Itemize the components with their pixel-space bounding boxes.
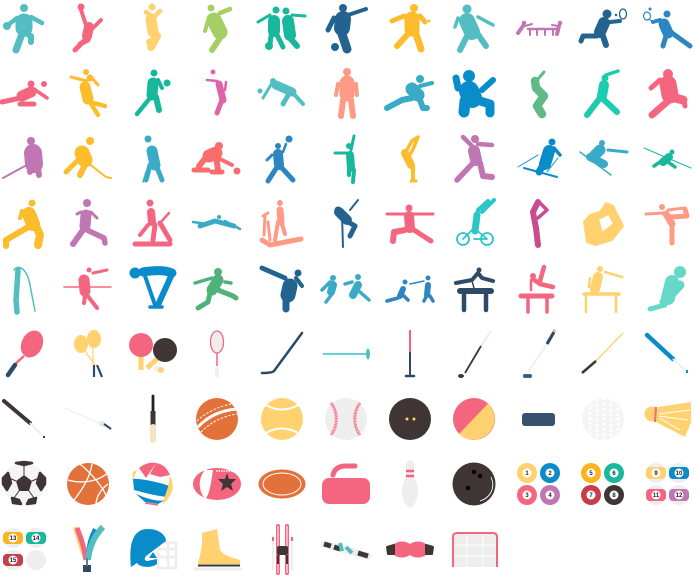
- icon: baseball catcher: [456, 76, 493, 113]
- icon: two martial artists: [322, 277, 369, 302]
- icon: basketball: [67, 463, 109, 505]
- icon: seated figure: [650, 272, 680, 309]
- icon: handball player: [267, 139, 293, 181]
- icon: football player running: [387, 79, 432, 108]
- icon: yoga warrior pose: [387, 208, 433, 241]
- icon: figure skater jump: [457, 137, 492, 180]
- icon: alpine skier: [518, 142, 560, 177]
- icon: red and navy mallet: [406, 330, 414, 376]
- icon: rugby ball: [258, 470, 306, 498]
- icon: billiard balls 1 to 4: 1: [525, 471, 529, 477]
- icon: baseball batter standing: [535, 72, 544, 114]
- icon: tennis ball: [261, 398, 303, 440]
- icon: billiard balls 1 to 4: 4: [548, 493, 552, 499]
- icon: baseball pitcher: [651, 74, 685, 115]
- icon: billiard balls 9 to 12: 12: [676, 493, 683, 499]
- icon: table tennis match: [518, 23, 560, 35]
- icon: tennis racket of serving player: [644, 12, 650, 20]
- icon: billiard balls 9 to 12: 10: [676, 471, 683, 477]
- icon: curling player: [194, 146, 237, 172]
- icon: american football: [193, 468, 241, 500]
- icon: table tennis player forehand: [392, 8, 429, 49]
- icon: billiard balls 5 to 8: [581, 463, 624, 505]
- icon: cricket ball: [196, 398, 238, 440]
- icon: downhill skier crouched: [644, 148, 691, 168]
- icon: billiard balls 13 to 15 and cue ball: [3, 528, 46, 570]
- icon: volleyball: [132, 463, 174, 505]
- icon: female runner: [73, 203, 105, 244]
- icon: billiard balls 1 to 4: 3: [525, 493, 529, 499]
- icon: billiard balls 9 to 12: [646, 463, 689, 505]
- icon: blue baseball bat: [647, 335, 687, 373]
- icon: volleyball dig: [260, 81, 303, 104]
- icon: billiard balls 9 to 12: 11: [653, 493, 660, 499]
- icon: billiard balls 13 to 15 and cue ball: 13: [10, 536, 17, 542]
- icon: billiard balls 5 to 8: 5: [589, 471, 593, 477]
- icon: golf ball: [582, 398, 624, 440]
- icon: skis and poles: [273, 526, 292, 573]
- icon: billiard balls 1 to 4: 2: [548, 471, 552, 477]
- icon: cricket bat: [152, 396, 154, 440]
- icon: fencing foil: [65, 408, 111, 429]
- icon: high jumper: [64, 270, 111, 308]
- icon: tennis racket: [8, 327, 47, 375]
- icon: figure skater arms wide: [335, 136, 354, 182]
- icon: pole climber: [338, 200, 358, 247]
- icon: boxing gloves: [387, 542, 433, 558]
- icon: tennis player serve: [650, 9, 690, 46]
- icon: ice hockey puck: [522, 413, 555, 426]
- icon: shuttlecock: [644, 402, 691, 437]
- icon: soccer kicker: [328, 8, 366, 49]
- icon: volleyball dive: [2, 84, 47, 104]
- icon: black baseball bat: [4, 401, 44, 438]
- icon: baseball: [325, 398, 367, 440]
- icon: tennis racket of lunging player: [620, 9, 626, 19]
- icon: ice hockey goal: [453, 533, 497, 567]
- icon: feather shuttlecock: [75, 527, 103, 572]
- icon: tennis player lunge: [581, 14, 620, 45]
- icon: basketball dunk: [75, 7, 101, 50]
- icon: hockey stick: [262, 333, 302, 373]
- icon: basketball shooter: [146, 7, 160, 47]
- icon: billiard balls 5 to 8: 8: [612, 493, 616, 499]
- icon: billiard cue: [582, 333, 623, 373]
- icon: soccer player: [205, 8, 230, 50]
- icon: billiard balls 9 to 12: 9: [654, 471, 658, 477]
- icon: basketball dribbler: [7, 8, 42, 50]
- icon: volleyball set: [207, 72, 226, 113]
- icon: table tennis paddles: [129, 333, 177, 373]
- icon: teal mallet: [323, 348, 370, 360]
- icon: billiard balls 5 to 8: 6: [612, 471, 616, 477]
- icon: squash ball: [389, 398, 431, 440]
- icon: pommel horse: [456, 270, 493, 310]
- icon: gymnast backbend: [584, 203, 623, 245]
- icon: sprinter: [6, 203, 40, 246]
- icon: football helmet: [130, 529, 176, 568]
- icon: table tennis player ready: [455, 9, 493, 50]
- icon: yoga dancer pose: [646, 207, 687, 243]
- icon: billiard balls 13 to 15 and cue ball: 15: [10, 558, 17, 564]
- icon: baseball batter swinging: [587, 71, 618, 115]
- icon: bicycle acrobat: [457, 200, 494, 245]
- icon: balance beam gymnast yellow: [584, 269, 622, 312]
- icon: treadmill walker: [262, 203, 301, 245]
- icon: golf driver: [458, 331, 491, 378]
- icon: football player standing: [336, 72, 357, 116]
- icon: billiard balls 13 to 15 and cue ball: 14: [33, 536, 40, 542]
- icon: bowling ball: [452, 462, 496, 506]
- icon: red and yellow ball: [453, 398, 495, 440]
- icon: badminton rackets: [74, 330, 102, 377]
- icon: ice hockey player bent: [3, 141, 39, 178]
- icon: snowboard: [324, 543, 368, 556]
- icon: pole vaulter: [14, 267, 35, 312]
- icon: curling stone: [322, 466, 370, 504]
- icon: figure skater biellmann: [405, 137, 418, 181]
- icon: hurdler: [195, 272, 236, 308]
- icon: two soccer players: [258, 10, 305, 47]
- icon: volleyball spike: [71, 72, 105, 115]
- icon: treadmill runner: [135, 203, 170, 244]
- icon: billiard balls 1 to 4: [517, 463, 560, 505]
- icon: golf putter: [525, 330, 555, 376]
- icon: billiard balls 5 to 8: 7: [589, 493, 593, 499]
- icon: soccer ball: [3, 462, 45, 504]
- icon: balance beam gymnast red: [521, 267, 553, 312]
- icon: golfer standing: [143, 139, 162, 182]
- icon: ice hockey player skating: [66, 141, 111, 178]
- icon: swimmer: [193, 217, 240, 229]
- icon: gymnast standing split: [533, 201, 547, 245]
- icon: snowboarder: [580, 143, 627, 175]
- icon: ice skate: [195, 529, 241, 569]
- icon: athlete in starting stance: [135, 271, 172, 307]
- icon: squash racket: [210, 331, 224, 377]
- icon: fencers: [387, 278, 433, 301]
- icon: volleyball player holding ball: [137, 73, 167, 114]
- icon: karate kick: [262, 268, 302, 309]
- icon: bowling pin: [402, 460, 418, 508]
